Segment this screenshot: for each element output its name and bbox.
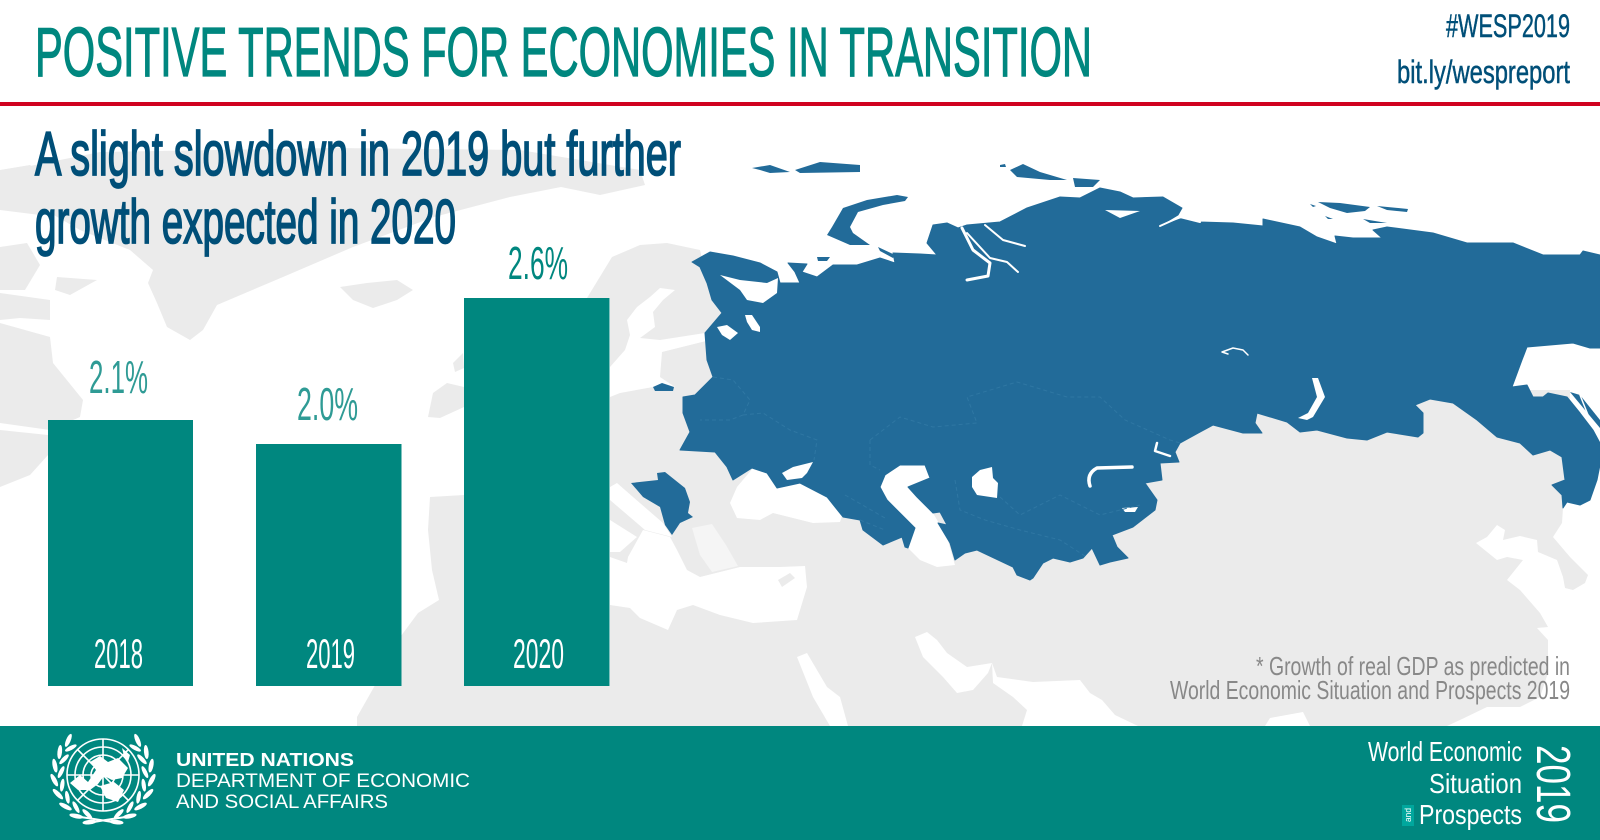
subtitle: A slight slowdown in 2019 but further — [35, 120, 681, 189]
bar 2018: 2.1% — [89, 351, 148, 403]
WESP 2019 logo — [1368, 736, 1579, 830]
map: economies in transition highlighted — [631, 162, 1600, 580]
icon: UN emblem — [49, 733, 157, 825]
bar 2020: 2.6% — [508, 237, 568, 289]
bar 2018 — [48, 351, 193, 686]
UN DESA wordmark: UNITED NATIONS — [176, 750, 354, 770]
left olive branch — [49, 733, 97, 825]
WESP 2019 logo: Situation — [1429, 768, 1522, 799]
footnote — [1170, 651, 1570, 705]
WESP 2019 logo: Prospects — [1419, 799, 1522, 830]
bar 2018: 2018 — [94, 630, 143, 677]
WESP 2019 logo: and — [1403, 808, 1413, 822]
UN DESA wordmark: DEPARTMENT OF ECONOMIC — [176, 771, 470, 792]
lakes and gulfs on the landmass — [717, 210, 1325, 512]
bar 2019: 2019 — [306, 630, 355, 677]
red header rule — [0, 102, 1600, 106]
WESP 2019 logo: World Economic — [1368, 736, 1522, 767]
bar 2019: 2.0% — [297, 378, 358, 430]
UN DESA wordmark: AND SOCIAL AFFAIRS — [176, 792, 388, 813]
footer band — [0, 726, 1600, 840]
islands and exclaves — [631, 162, 1600, 535]
grey land masses — [0, 148, 1588, 726]
subtitle: growth expected in 2020 — [35, 188, 456, 257]
bar chart: GDP growth — [48, 237, 610, 686]
Russia, Central Asia and CIS landmass — [680, 188, 1600, 580]
bar 2020 — [464, 237, 610, 686]
seas cut from the grey land — [610, 288, 1310, 726]
subtitle — [35, 120, 681, 257]
bar 2020: 2020 — [513, 630, 564, 677]
country borders — [700, 377, 1180, 556]
hashtag and report link — [1397, 8, 1570, 90]
bar 2019 — [256, 378, 402, 686]
right olive branch — [109, 733, 157, 825]
world map background — [0, 148, 1588, 726]
UN DESA wordmark — [176, 750, 470, 813]
